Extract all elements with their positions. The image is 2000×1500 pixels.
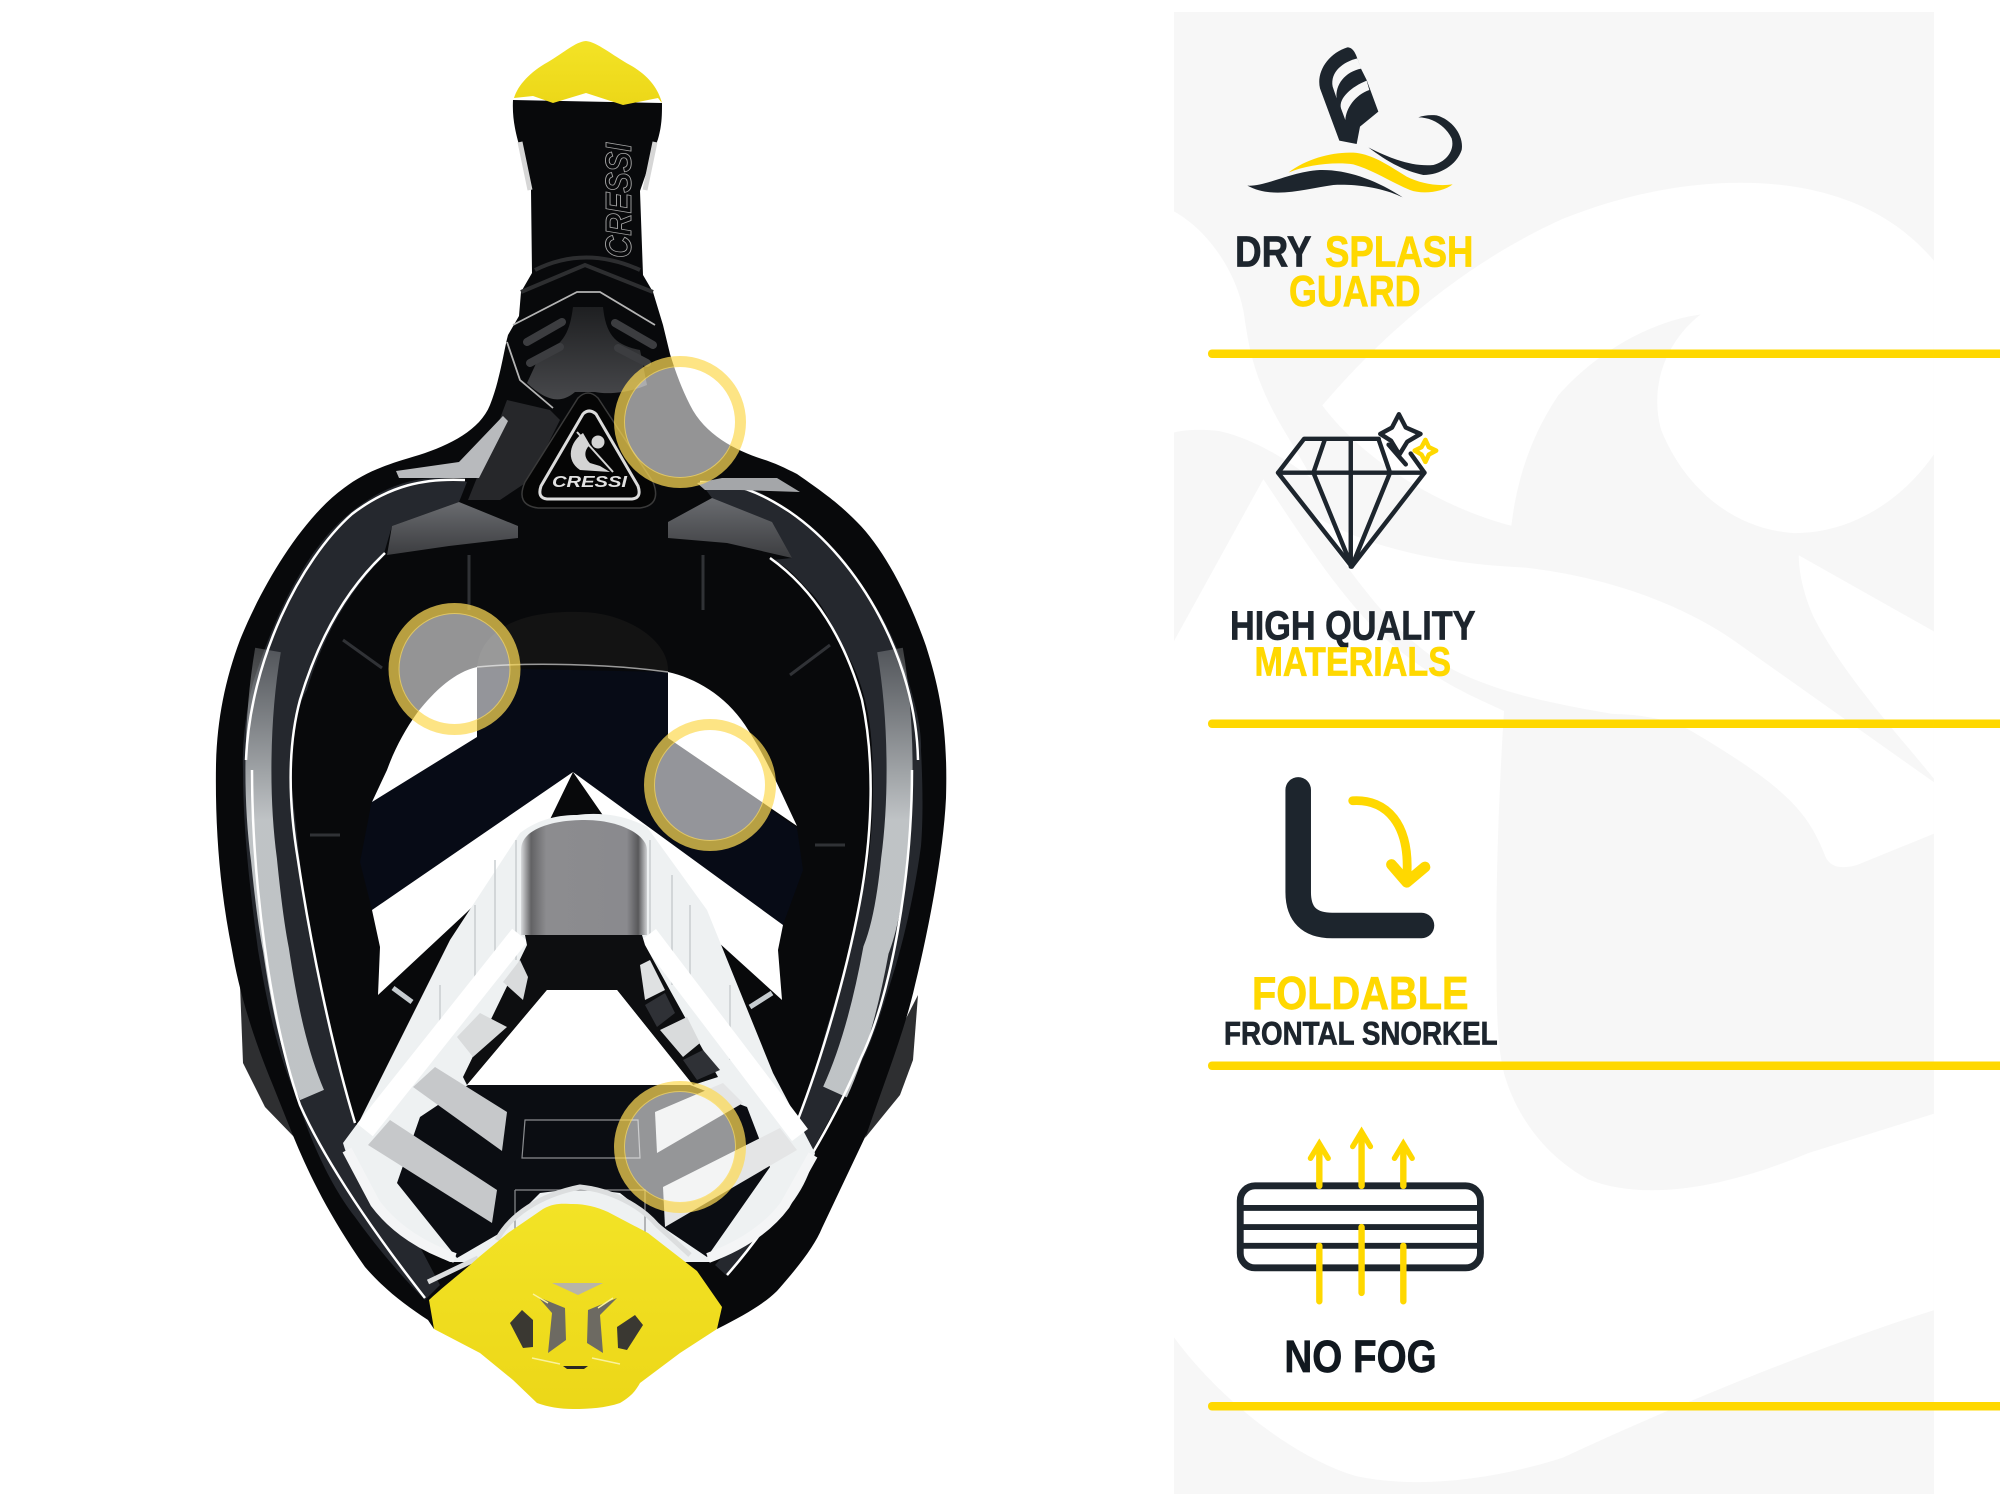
window left xyxy=(372,667,477,802)
valve seat gloss xyxy=(428,1187,690,1282)
product photo: full face snorkel mask xyxy=(216,41,946,1409)
snorkel side gloss xyxy=(520,142,655,190)
right lens highlights xyxy=(835,650,900,1092)
right lens rim xyxy=(700,481,922,1276)
icon: no fog membrane with arrows xyxy=(1240,1132,1480,1301)
callout circle: head strap xyxy=(650,724,770,846)
valve bar highlights xyxy=(532,1294,620,1364)
icon: foldable snorkel xyxy=(1298,790,1425,925)
icon: dry splash guard fin and waves xyxy=(1247,47,1462,197)
top rim reflection left xyxy=(396,416,508,478)
collar vents xyxy=(527,322,653,363)
heading: dry splash guard: SPLASH xyxy=(1325,228,1474,276)
white triangle xyxy=(467,990,693,1085)
chevron window right xyxy=(573,772,783,1000)
top rim reflection right xyxy=(697,478,800,492)
callout circle: top right of snorkel neck xyxy=(620,362,740,482)
inner pad xyxy=(477,612,668,672)
chevron window left xyxy=(372,772,573,995)
slats left xyxy=(368,960,528,1223)
cup inner diagonals xyxy=(365,935,800,1135)
window right xyxy=(668,672,797,826)
divider lines xyxy=(1208,350,2000,1410)
panel: background with brand swirl xyxy=(1174,12,1934,1494)
heading: dry splash guard: GUARD xyxy=(1289,268,1420,316)
left lens rim xyxy=(243,478,467,1300)
head strap xyxy=(360,668,803,925)
logo badge xyxy=(522,393,656,508)
side strap bump left xyxy=(240,985,295,1138)
logo badge: CRESSI xyxy=(552,474,628,491)
brow gloss right xyxy=(668,498,792,558)
heading: no fog: NO FOG xyxy=(1284,1331,1437,1382)
brow gloss left xyxy=(387,502,518,555)
centre panels xyxy=(515,1120,645,1235)
cup white rim xyxy=(347,1150,813,1258)
icon: diamond with sparkle xyxy=(1278,414,1436,567)
nose cup grey centre xyxy=(521,820,647,935)
heading: high quality materials: MATERIALS xyxy=(1254,638,1451,684)
collar detail xyxy=(521,258,653,292)
slats right xyxy=(640,960,797,1227)
valve openings xyxy=(510,1283,643,1369)
left lens highlights xyxy=(258,650,312,1095)
side strap bump right xyxy=(865,995,918,1138)
mask body silhouette xyxy=(216,100,946,1329)
yellow purge valve xyxy=(429,1204,722,1409)
nose cup xyxy=(343,814,815,1262)
yellow snorkel cap xyxy=(514,41,662,105)
heading: foldable frontal snorkel: FOLDABLE xyxy=(1252,967,1469,1019)
dark nose yoke xyxy=(463,935,718,1085)
neck shading xyxy=(527,307,647,399)
heading: dry splash guard: DRY xyxy=(1235,228,1312,276)
callout circle: left inner frame xyxy=(394,608,515,730)
snorkel brand lettering: CRESSI xyxy=(598,142,639,258)
pad arc line xyxy=(477,664,668,672)
small clips xyxy=(393,988,772,1007)
heading: high quality materials: HIGH QUALITY xyxy=(1230,603,1476,649)
inner frame ticks xyxy=(310,555,845,845)
heading: high quality materials xyxy=(1230,603,1476,684)
callout circle: nose cup xyxy=(620,1086,740,1208)
shoulder shading xyxy=(468,400,560,500)
dark lower chamber xyxy=(397,1085,770,1258)
cup side ribs xyxy=(440,840,730,1060)
heading: foldable frontal snorkel: FRONTAL SNORKEL xyxy=(1224,1015,1498,1051)
collar highlights xyxy=(480,292,655,457)
heading: dry splash guard xyxy=(1235,228,1474,316)
heading: foldable frontal snorkel xyxy=(1224,967,1498,1051)
